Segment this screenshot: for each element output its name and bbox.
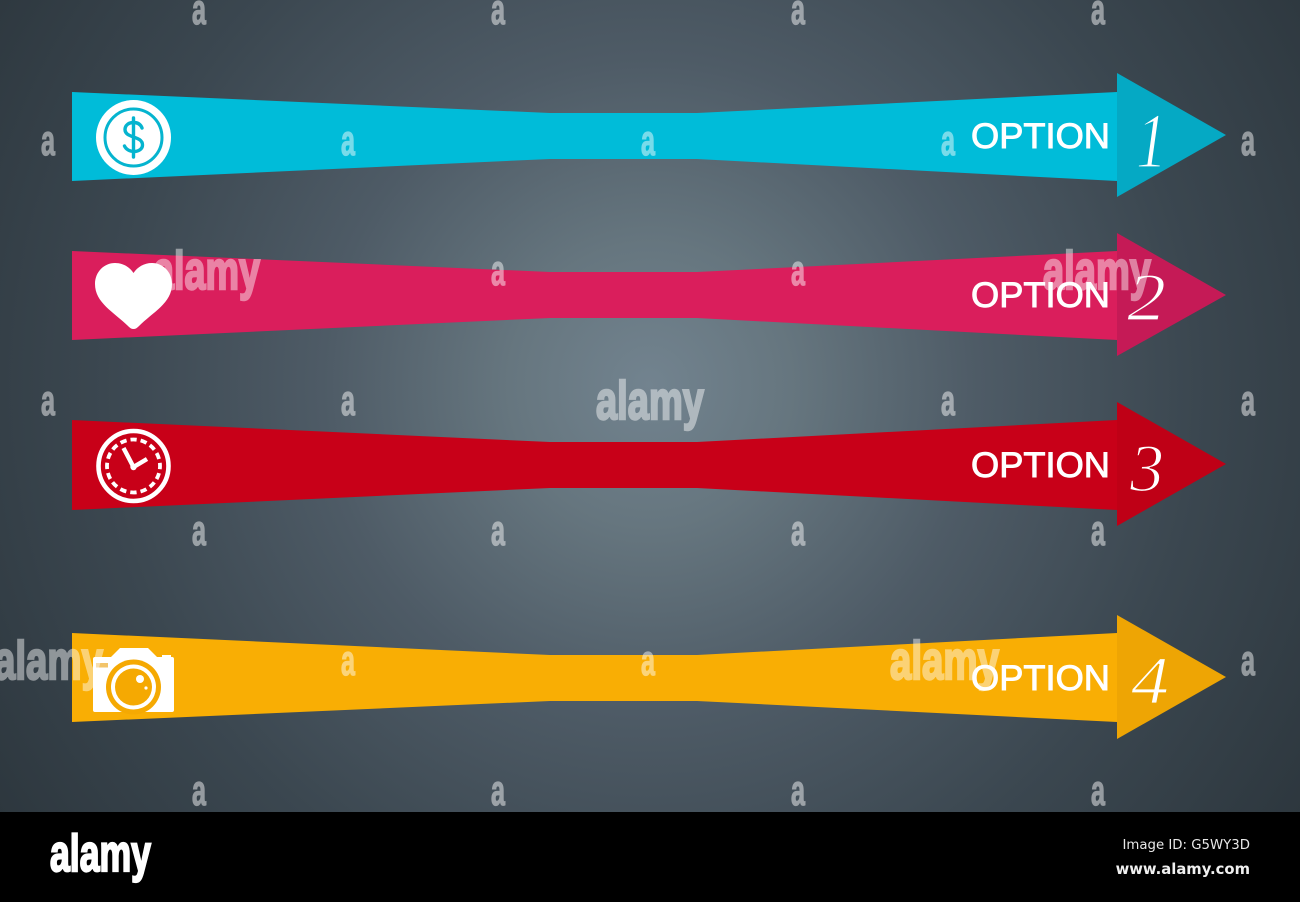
watermark: small letter grid: a <box>791 507 806 555</box>
watermark: small letter grid: a <box>1241 637 1256 685</box>
watermark: small letter grid: a <box>192 767 207 815</box>
watermark: small letter grid: a <box>1241 117 1256 165</box>
watermark: large logos: alamy <box>1043 241 1151 301</box>
watermark: small letter grid: a <box>641 117 656 165</box>
watermark: small letter grid: a <box>491 507 506 555</box>
watermark: small letter grid: a <box>341 377 356 425</box>
number 3: 3 <box>1129 430 1164 506</box>
arrow 2: pink option 2 <box>72 233 1226 356</box>
footer bar <box>0 812 1300 902</box>
icon: heart <box>95 263 172 329</box>
website: www.alamy.com <box>1116 861 1250 878</box>
number 2: 2 <box>1127 259 1166 335</box>
watermark: small letter grid: a <box>1091 767 1106 815</box>
arrow 4: orange option 4 <box>72 615 1226 739</box>
icon: dollar coin <box>96 100 171 175</box>
watermark: small letter grid: a <box>1091 507 1106 555</box>
label: option 4: OPTION <box>971 659 1110 698</box>
watermark: small letter grid: a <box>491 247 506 295</box>
number 1: 1 <box>1136 97 1167 184</box>
watermark: large logos <box>0 241 1151 691</box>
watermark: small letter grid: a <box>491 767 506 815</box>
label: option 3: OPTION <box>971 446 1110 485</box>
watermark: large logos: alamy <box>596 371 704 431</box>
watermark: small letter grid: a <box>341 117 356 165</box>
watermark: small letter grid: a <box>41 117 56 165</box>
label: option 2: OPTION <box>971 276 1110 315</box>
watermark: small letter grid: a <box>1241 377 1256 425</box>
arrow 1: cyan option 1 <box>72 73 1226 197</box>
arrowhead 1 <box>1117 73 1226 197</box>
watermark: small letter grid: a <box>941 117 956 165</box>
watermark: small letter grid: a <box>641 637 656 685</box>
image id: Image ID: G5WY3D <box>1123 838 1250 853</box>
arrowhead 3 <box>1117 402 1226 526</box>
watermark: small letter grid: a <box>192 507 207 555</box>
watermark: large logos: alamy <box>153 241 260 301</box>
watermark: small letter grid: a <box>941 377 956 425</box>
arrow 3: red option 3 <box>72 402 1226 526</box>
watermark: small letter grid: a <box>41 377 56 425</box>
icon: camera <box>93 648 174 714</box>
watermark: small letter grid: a <box>341 637 356 685</box>
label: option 1: OPTION <box>971 117 1110 156</box>
number 4: 4 <box>1131 642 1169 718</box>
footer logo: alamy <box>50 825 151 883</box>
arrowhead 4 <box>1117 615 1226 739</box>
watermark: small letter grid: a <box>791 247 806 295</box>
arrowhead 2 <box>1117 233 1226 356</box>
watermark: large logos: alamy <box>890 631 999 691</box>
watermark: small letter grid: a <box>791 767 806 815</box>
icon: clock <box>98 431 168 501</box>
